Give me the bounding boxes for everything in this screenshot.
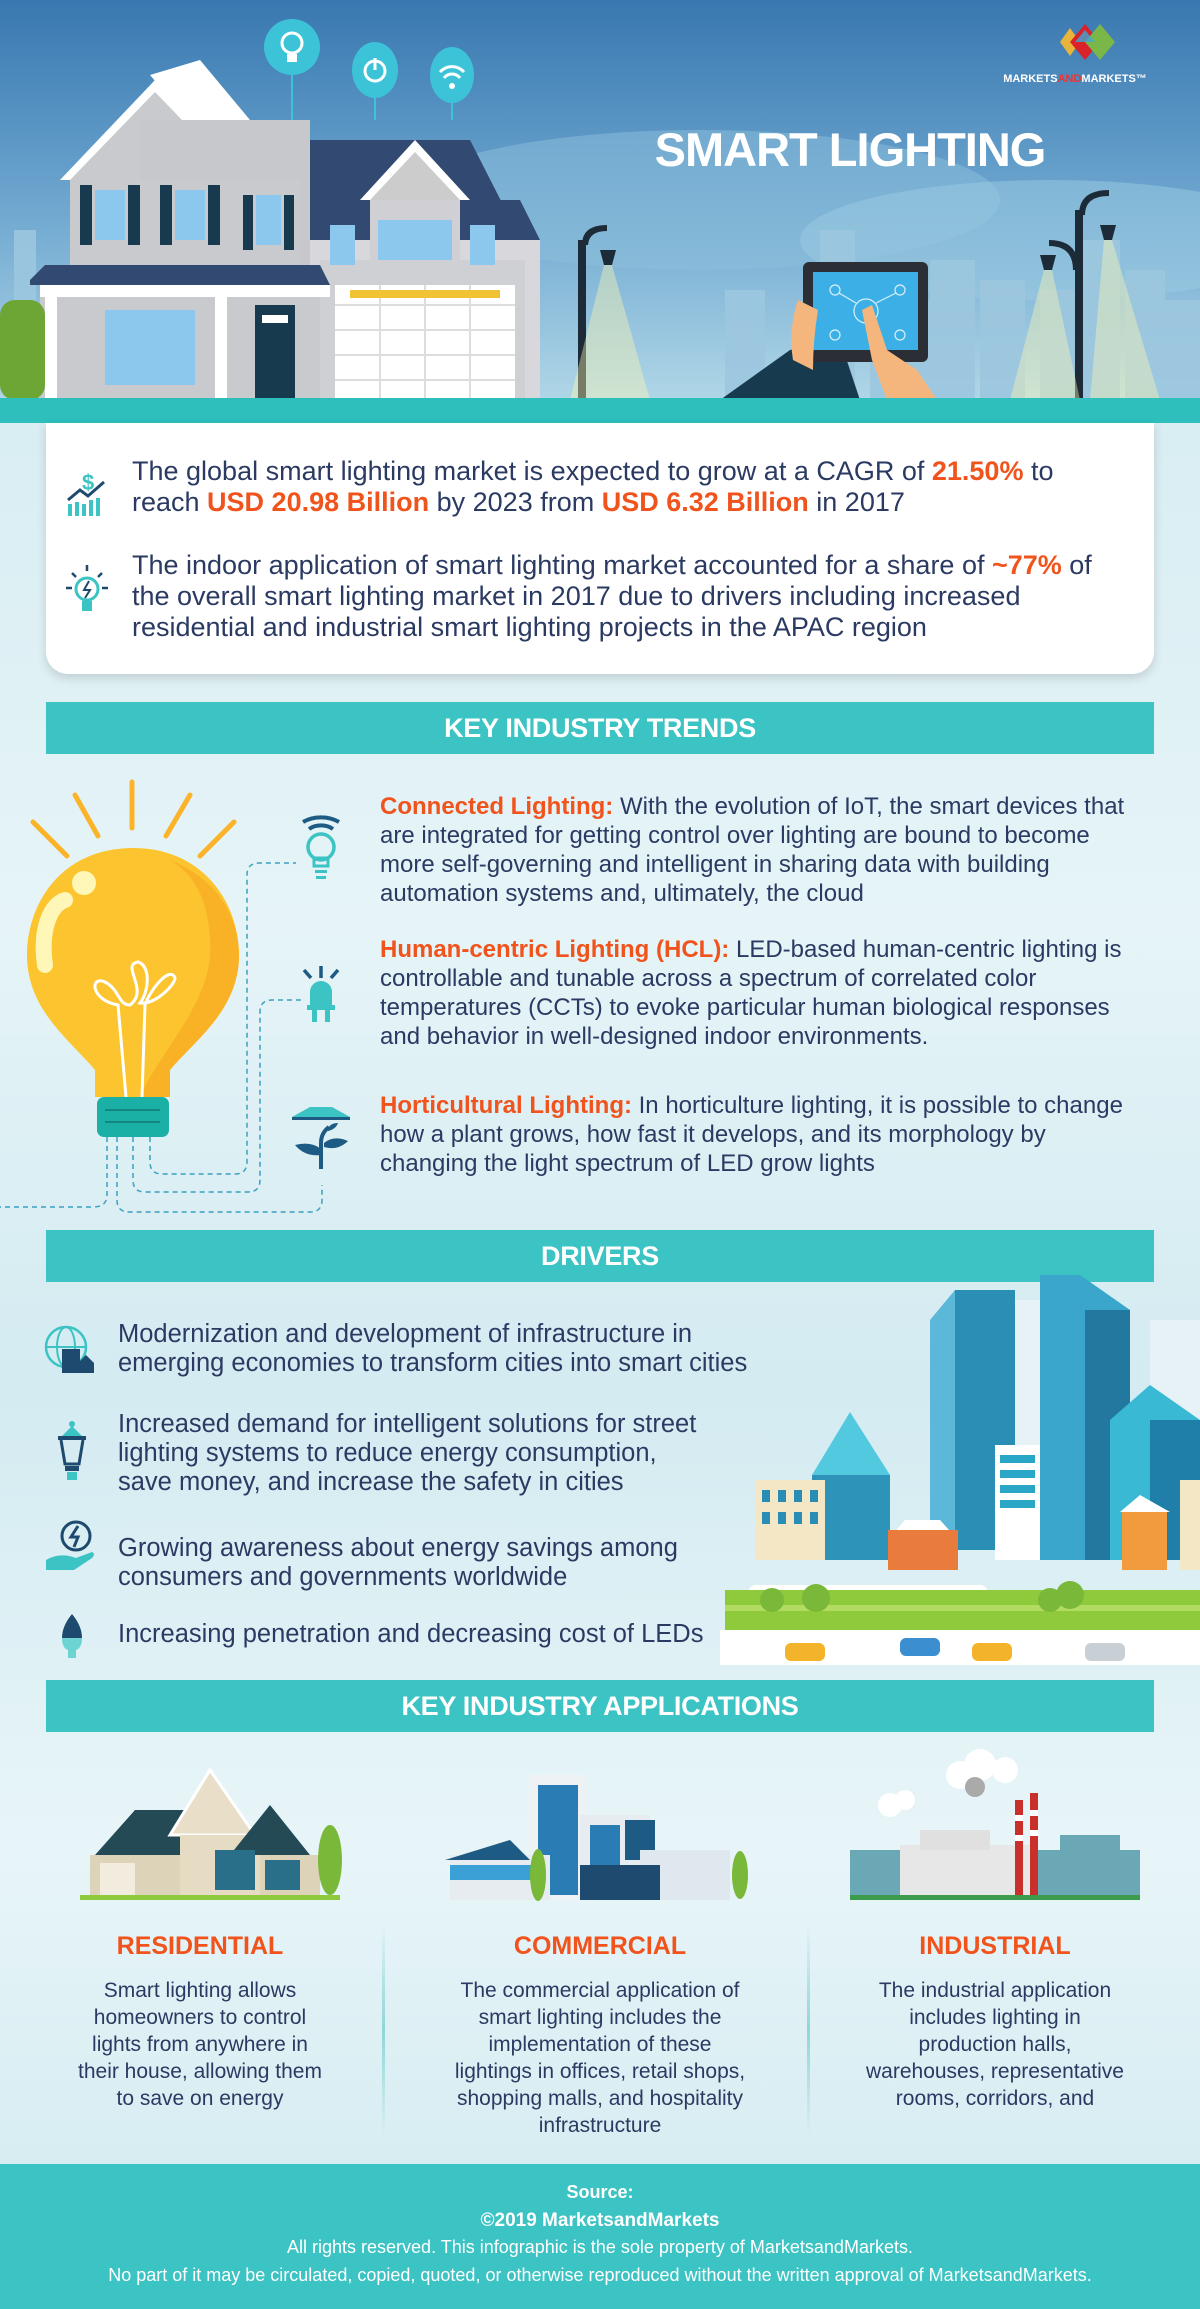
text: driver 3: Growing awareness about energy savings among (118, 1534, 678, 1562)
text: industrial (866, 1979, 1124, 2110)
text: industrial: rooms, corridors, and (896, 2087, 1094, 2110)
icon: led (302, 966, 340, 1022)
logo: MARKETSANDMARKETS™ (1003, 73, 1147, 85)
text: commercial: implementation of these (489, 2033, 711, 2056)
footer: source: All rights reserved. This infographic is the sole property of MarketsandMarkets. (287, 2237, 913, 2257)
text: commercial: infrastructure (539, 2114, 661, 2137)
icon: big bulb (0, 780, 323, 1213)
heading: key industry trends: KEY INDUSTRY TRENDS (444, 713, 756, 743)
text: HCL: Human-centric Lighting (HCL): LED-based human-centric lighting is (380, 936, 1122, 963)
tablet + hands (720, 340, 860, 400)
text: connected lighting: automation systems and, ultimately, the cloud (380, 880, 864, 907)
text: driver 2 (118, 1410, 696, 1496)
heading: key industry applications: KEY INDUSTRY APPLICATIONS (401, 1691, 799, 1721)
text: driver 2: Increased demand for intelligent solutions for street (118, 1410, 696, 1438)
text: driver 2: lighting systems to reduce energy consumption, (118, 1439, 657, 1467)
text: residential (78, 1979, 322, 2110)
icons over house (291, 50, 293, 120)
illustration: house (80, 1768, 342, 1900)
icon: plant grow light (292, 1107, 350, 1169)
text: driver 1: Modernization and development of infrastructure in (118, 1320, 692, 1348)
icon: growth chart: $ (82, 470, 94, 495)
icon: street lamp (58, 1421, 86, 1480)
text: residential: their house, allowing them (78, 2060, 322, 2083)
icon: led bulb (62, 1614, 82, 1658)
text: HCL: controllable and tunable across a spectrum of correlated color (380, 965, 1036, 992)
illustration: office buildings (445, 1775, 748, 1901)
text: indoor share: the overall smart lighting market in 2017 due to drivers including increased (132, 581, 1020, 611)
panel: key stats card (46, 423, 1154, 674)
heading: residential: RESIDENTIAL (117, 1932, 283, 1960)
text: horticultural: changing the light spectrum of LED grow lights (380, 1150, 875, 1177)
text: industrial: production halls, (919, 2033, 1071, 2056)
heading: key industry applications (46, 1680, 1154, 1732)
text: indoor share (132, 550, 1092, 642)
text: market growth: The global smart lighting market is expected to grow at a CAGR of 21.50% to (132, 456, 1053, 486)
text: HCL: and behavior in well-designed indoor environments. (380, 1023, 928, 1050)
text: horticultural (380, 1092, 1123, 1177)
text: driver 1 (118, 1320, 747, 1377)
icon: wifi bulb (302, 815, 340, 879)
text: horticultural: Horticultural Lighting: In horticulture lighting, it is possible to change (380, 1092, 1123, 1119)
text: industrial: warehouses, representative (866, 2060, 1124, 2083)
panel: residential (78, 1768, 342, 2110)
text: driver 1: emerging economies to transform cities into smart cities (118, 1349, 747, 1377)
text: industrial: The industrial application (879, 1979, 1111, 2002)
text: residential: Smart lighting allows (104, 1979, 296, 2002)
heading: key industry trends (46, 702, 1154, 754)
text: commercial (455, 1979, 745, 2137)
illustration: factory (850, 1749, 1140, 1900)
icon: idea bulb (66, 565, 108, 611)
illustration: smart city (720, 1275, 1200, 1665)
street lamps (578, 190, 1116, 400)
text: HCL (380, 936, 1122, 1050)
footer: source: ©2019 MarketsandMarkets (481, 2210, 719, 2230)
icon: globe city (44, 1326, 94, 1373)
text: market growth (132, 456, 1053, 517)
house (290, 240, 540, 400)
text: commercial: smart lighting includes the (479, 2006, 721, 2029)
text: residential: homeowners to control (94, 2006, 306, 2029)
text: industrial: includes lighting in (909, 2006, 1081, 2029)
text: indoor share: residential and industrial smart lighting projects in the APAC region (132, 612, 927, 642)
heading: drivers (46, 1230, 1154, 1282)
heading: drivers: DRIVERS (541, 1241, 659, 1271)
title: SMART LIGHTING (655, 123, 1045, 176)
text: connected lighting: more self-governing and intelligent in sharing data with building (380, 851, 1050, 878)
text: HCL: temperatures (CCTs) to evoke particular human biological responses (380, 994, 1110, 1021)
heading: commercial: COMMERCIAL (514, 1932, 686, 1960)
text: driver 2: save money, and increase the safety in cities (118, 1468, 624, 1496)
header scene (0, 0, 1200, 423)
text: market growth: reach USD 20.98 Billion by 2023 from USD 6.32 Billion in 2017 (132, 487, 905, 517)
icon: growth chart (67, 470, 105, 516)
text: connected lighting: are integrated for getting control over lighting are bound to become (380, 822, 1090, 849)
footer: source: Source: (566, 2182, 634, 2202)
panel: industrial (850, 1749, 1140, 2110)
text: driver 4: Increasing penetration and decreasing cost of LEDs (118, 1620, 703, 1648)
logo (1003, 24, 1147, 85)
text: connected lighting: Connected Lighting: With the evolution of IoT, the smart devices that (380, 793, 1124, 820)
icon: energy hand (46, 1520, 94, 1570)
text: commercial: lightings in offices, retail shops, (455, 2060, 745, 2083)
text: residential: to save on energy (117, 2087, 283, 2110)
text: driver 3 (118, 1534, 678, 1591)
text: driver 3: consumers and governments worldwide (118, 1563, 567, 1591)
panel: commercial (445, 1775, 748, 2137)
text: residential: lights from anywhere in (92, 2033, 308, 2056)
text: commercial: The commercial application of (461, 1979, 739, 2002)
text: indoor share: The indoor application of smart lighting market accounted for a share of ~77% of (132, 550, 1092, 580)
text: connected lighting (380, 793, 1124, 907)
text: commercial: shopping malls, and hospitality (457, 2087, 743, 2110)
heading: industrial: INDUSTRIAL (919, 1932, 1071, 1960)
text: horticultural: how a plant grows, how fast it develops, and its morphology by (380, 1121, 1046, 1148)
footer: source (0, 2164, 1200, 2309)
footer: source: No part of it may be circulated, copied, quoted, or otherwise reproduced without the written approval of MarketsandMarkets. (108, 2264, 1092, 2284)
